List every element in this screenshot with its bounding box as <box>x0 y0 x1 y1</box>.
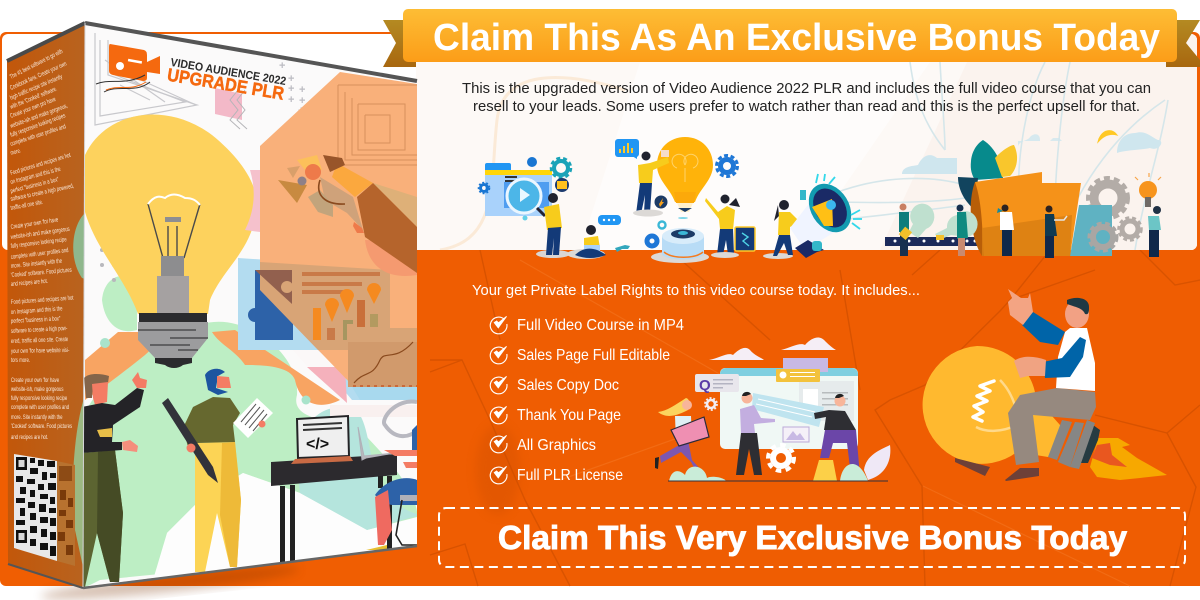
item: Sales Copy Doc <box>490 376 619 394</box>
intro paragraph: resell to your leads. Some users prefer to watch rather than read and this is the perfect upsell for that. <box>473 99 1140 115</box>
panel: white top area <box>2 34 1197 250</box>
laptop screen <box>297 416 349 458</box>
side text: perfect "business in a box" <box>10 176 60 195</box>
flyer: peach stripes <box>365 240 417 276</box>
icon: small gear <box>1089 223 1117 251</box>
flyer: torso <box>320 177 363 230</box>
logo: video camera icon <box>96 44 160 92</box>
box side face <box>7 23 85 588</box>
man: head <box>1065 300 1089 328</box>
decorative triangles pattern <box>95 33 197 125</box>
bulb screw base <box>138 313 208 368</box>
white wave <box>154 473 417 578</box>
icon: pink square zigzag <box>215 88 247 129</box>
side text: and recipes are hot. <box>11 278 49 288</box>
side text: website-ish and make gorgeous, <box>9 103 69 130</box>
man: face <box>217 376 231 388</box>
icon: white clouds <box>709 338 836 360</box>
ribbon right tail <box>1166 20 1200 67</box>
box corner highlight <box>83 23 85 587</box>
icon: big megaphone <box>790 174 862 258</box>
man: near arm <box>1043 337 1086 378</box>
figure: running woman <box>655 398 709 477</box>
side text: Food pictures and recipes are hot <box>10 152 72 177</box>
side text: fully responsive looking recipes <box>9 113 67 139</box>
dashed outline <box>439 508 1185 567</box>
figure: man holding note <box>633 150 669 216</box>
side text: on Instagram and this is the <box>11 306 63 316</box>
intro paragraph: This is the upgraded version of Video Audience 2022 PLR and includes the full video course that you can <box>462 81 1151 97</box>
plus signs: + <box>299 95 305 107</box>
side text: complete with user profiles and <box>10 124 67 148</box>
side text: 'Cooked' software. Food pictures <box>11 267 72 279</box>
figure: man with magnifier <box>536 193 570 258</box>
icon: inner flame <box>1092 443 1127 467</box>
side text: your own 'for have website visi- <box>11 347 70 355</box>
grey donut <box>384 402 417 436</box>
ribbon bar <box>403 9 1177 62</box>
teal blob <box>298 407 420 530</box>
side text <box>9 48 75 441</box>
side text: ered, traffic all one site. Create <box>11 336 68 345</box>
yellow bulb <box>85 115 257 314</box>
illustration: folder factory team <box>885 131 1161 258</box>
icon: rocket flame <box>1090 438 1167 480</box>
icon: orange folder <box>971 172 1081 256</box>
title: Claim This As An Exclusive Bonus Today <box>433 17 1160 59</box>
bars card in overlay <box>255 262 417 350</box>
man: paper <box>233 398 273 438</box>
plus signs: + <box>279 60 285 72</box>
side text: tors more. <box>11 357 30 364</box>
QR code <box>14 454 75 566</box>
item: Thank You Page <box>490 406 621 424</box>
side text: Cookbook fans. Create your own <box>9 61 68 92</box>
pink strip <box>307 367 347 403</box>
icon: sliding banner card <box>752 393 824 442</box>
figure: desk and laptop <box>271 416 397 563</box>
icon: ground plants <box>668 445 890 481</box>
peach overlay panel <box>260 72 417 387</box>
icon: gears <box>1088 178 1142 240</box>
side text: Create your own 'for have <box>11 377 59 384</box>
side text: website-ish, make gorgeous <box>10 386 64 393</box>
white strip <box>310 350 334 367</box>
flyer: cape light band <box>373 183 417 227</box>
item: Sales Page Full Editable: Sales Page Full Editable <box>517 347 670 364</box>
figure: middle man olive shirt <box>162 369 273 572</box>
side text: software to create a high pow- <box>11 325 68 335</box>
side text: website-ish and make gorgeous <box>10 226 70 241</box>
man: pants shade <box>220 442 241 567</box>
concentric squares <box>338 85 417 165</box>
flyer: triangle <box>287 166 300 178</box>
bulb filament <box>148 195 200 314</box>
man: shirt <box>183 397 240 447</box>
ribbon left tail <box>383 20 416 67</box>
second laptop <box>358 427 395 460</box>
side text: fully responsive looking recipe <box>10 236 67 250</box>
icon: small gear <box>705 398 717 410</box>
figure: man holding bulb <box>1135 173 1161 257</box>
box shadow <box>40 560 300 600</box>
icon: browser window <box>720 358 858 449</box>
item: Full Video Course in MP4: Full Video Course in MP4 <box>517 317 684 334</box>
side text: complete with user profiles and <box>11 404 69 411</box>
flyer: mic <box>298 176 306 186</box>
icon: white gear <box>768 445 794 471</box>
icon: search card: Q <box>699 377 711 394</box>
logo text <box>168 58 286 100</box>
man: hand on bulb <box>1014 357 1046 378</box>
icon: conveyor belt <box>885 237 985 246</box>
call to action <box>439 508 1185 567</box>
desk top <box>271 454 397 486</box>
man: shirt accent <box>97 428 112 437</box>
side text: perfect "business in a box" <box>11 316 61 325</box>
man: pants shade <box>97 450 123 582</box>
illustration: video team and idea bulb <box>478 137 862 263</box>
icon: blue gear <box>716 156 738 176</box>
puzzle light blue <box>238 258 360 400</box>
side text: more. <box>10 148 22 157</box>
side text: fully responsive looking recipe <box>11 395 67 402</box>
plus signs <box>280 62 305 110</box>
man: raised hand <box>132 372 147 388</box>
icon: bar chart bubble <box>615 139 639 159</box>
side text: Create your own 'for have <box>10 217 59 231</box>
puzzle blue piece <box>248 270 293 340</box>
desk legs <box>280 476 392 563</box>
figure: man pushing card <box>736 392 775 475</box>
plus signs: + <box>288 83 294 95</box>
man: hair <box>84 374 109 398</box>
mint blob <box>102 276 137 331</box>
figure: woman with laptop <box>763 200 800 259</box>
man: pants <box>80 450 123 587</box>
plus signs: + <box>288 94 294 106</box>
man: shoes <box>955 458 990 476</box>
man: hair <box>1067 298 1089 314</box>
icon: clouds <box>902 131 1161 174</box>
banner ribbon <box>383 9 1200 67</box>
figure: man with megaphone <box>705 194 755 258</box>
side text: Food pictures and recipes are hot <box>11 295 74 306</box>
man: hand holding pen <box>186 444 196 452</box>
box bottom edge <box>83 546 417 588</box>
icon: yellow bulb <box>923 346 1060 464</box>
side text: 'Cooked' software. Food pictures <box>11 423 72 430</box>
icon: rocket base <box>1048 420 1100 469</box>
man: hand pointing <box>1008 289 1033 325</box>
icon: leaves <box>958 140 1017 210</box>
figure: sitting man <box>955 289 1096 481</box>
pale pink behind <box>245 170 260 232</box>
orange shapes <box>85 330 340 405</box>
box top edge <box>85 23 417 81</box>
box front face <box>70 20 420 590</box>
item: Thank You Page: Thank You Page <box>517 407 621 424</box>
side text: high traffic recipe site instantly <box>9 74 64 102</box>
side text: software to create a high powered, <box>10 183 75 203</box>
icon: idea light bulb <box>657 137 713 212</box>
side text: on Instagram and this is the <box>10 166 62 186</box>
checklist <box>490 316 684 484</box>
flyer: megaphone <box>278 180 307 203</box>
figure: seated woman <box>366 425 417 550</box>
flyer: harness <box>319 180 345 204</box>
side text: complete with user profiles and <box>10 247 69 261</box>
side green spill lower <box>73 395 85 567</box>
flyer: jetpack <box>332 163 373 197</box>
man: hair and beard <box>205 369 228 395</box>
subheading: Your get Private Label Rights to this video course today. It includes... <box>472 282 920 299</box>
man: far arm <box>1022 312 1065 345</box>
icon: search card <box>695 374 739 394</box>
flyer: jetpack cap <box>323 155 345 172</box>
illustration: man riding bulb rocket <box>923 289 1167 481</box>
plus signs: + <box>299 84 305 96</box>
man: pants <box>195 442 241 572</box>
figure: sitting woman with bubble <box>567 215 621 259</box>
flyer: cape <box>357 183 417 273</box>
logo text: VIDEO AUDIENCE 2022 <box>170 57 287 88</box>
item: Sales Copy Doc: Sales Copy Doc <box>517 377 619 394</box>
line chart card <box>348 342 418 387</box>
side green spill upper <box>73 213 85 279</box>
icon: video folder <box>478 157 571 220</box>
side text: Create your own pro have <box>9 96 57 120</box>
green blob <box>70 322 417 590</box>
side text: more. Site instantly with the <box>11 258 62 270</box>
laptop keyboard <box>291 456 353 464</box>
flyer: hair <box>297 155 322 170</box>
icon: hologram machine <box>615 217 709 263</box>
man: sweater <box>82 388 144 453</box>
plus signs: + <box>288 73 294 85</box>
item: All Graphics: All Graphics <box>517 437 596 454</box>
side text: and recipes are hot. <box>11 434 49 441</box>
flyer: arm <box>308 190 333 217</box>
figure: left man black sweater <box>80 372 147 587</box>
item: Full PLR License: Full PLR License <box>517 467 623 484</box>
illustration: web page collaboration <box>655 338 890 481</box>
logo text: UPGRADE PLR <box>166 65 286 104</box>
item: All Graphics <box>490 435 596 454</box>
flyer: face <box>305 164 321 180</box>
plus signs: + <box>298 105 304 117</box>
man: face <box>92 382 108 405</box>
figure: man on step <box>813 394 860 481</box>
man: pen <box>162 398 218 483</box>
light blue strip <box>352 387 417 400</box>
small green dots <box>100 338 110 348</box>
figure: jetpack flyer <box>278 155 417 276</box>
dots pattern <box>100 248 116 282</box>
man: open hand <box>122 440 138 452</box>
figures: four workers <box>899 204 1067 258</box>
side text: with the 'Cooked' software. <box>9 86 59 111</box>
product box <box>7 20 420 600</box>
side text: The #1 best software to go with <box>9 48 64 81</box>
CTA text: Claim This Very Exclusive Bonus Today <box>498 519 1128 556</box>
icon: teal box <box>1070 205 1112 256</box>
man: trousers <box>1008 388 1096 465</box>
side text: more. Site instantly with the <box>11 414 62 421</box>
item: Full PLR License <box>490 466 623 484</box>
man: torso <box>1056 328 1095 391</box>
side text: traffic-all one site. <box>10 199 44 212</box>
flyer: hand <box>353 222 364 233</box>
intro paragraph <box>462 81 1151 115</box>
laptop code glyph: </> <box>306 436 329 453</box>
